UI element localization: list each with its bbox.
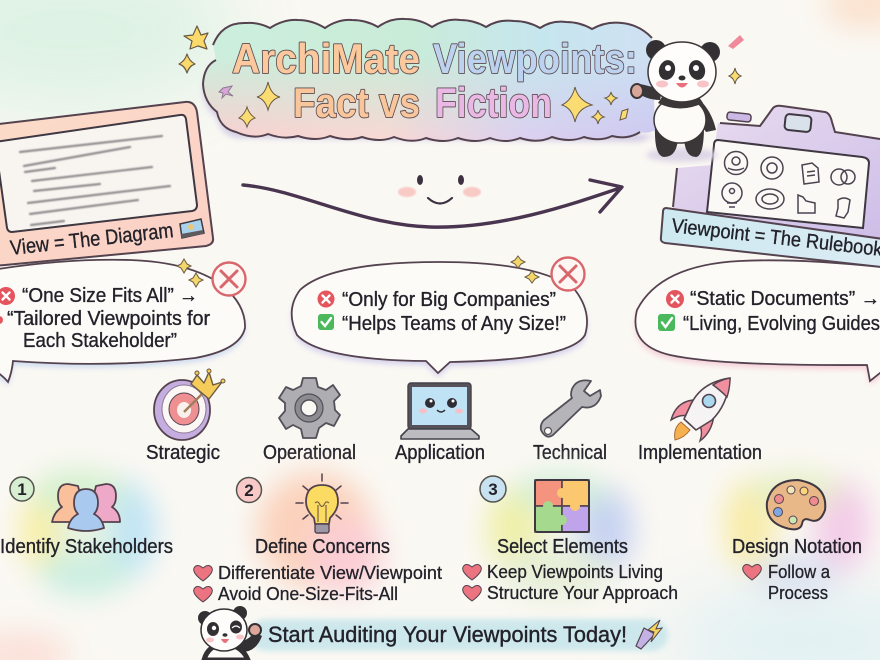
icon: green check — [658, 314, 675, 331]
step number — [480, 476, 506, 502]
camera screen — [707, 140, 869, 228]
step 2: define concerns — [194, 472, 442, 604]
layer icon: application laptop — [401, 383, 479, 439]
step number: 2 — [244, 481, 254, 500]
bubble text: “One Size Fits All” → — [22, 285, 198, 307]
layer icon: implementation rocket — [671, 378, 730, 441]
title text: Fact vs — [293, 79, 420, 126]
step label: Select Elements — [497, 536, 628, 558]
icon: palette — [767, 480, 825, 529]
icon: green check — [318, 314, 334, 330]
call to action banner — [250, 619, 668, 651]
glow — [20, 470, 156, 596]
step label: Define Concerns — [255, 536, 390, 558]
step label: Design Notation — [732, 536, 862, 558]
bubble text: “Only for Big Companies” — [342, 289, 556, 311]
screen icons — [722, 152, 855, 218]
layer labels — [146, 442, 762, 464]
title text: ArchiMate — [232, 35, 420, 82]
tips: Avoid One-Size-Fits-All — [218, 583, 398, 604]
icon: light bulb — [296, 474, 348, 533]
glow — [257, 472, 383, 593]
icon: big cross badge — [552, 258, 584, 290]
view frame: The Diagram — [0, 102, 213, 266]
step 3: select elements — [463, 474, 678, 603]
layer labels: Technical — [533, 442, 607, 464]
sparkles near panda — [728, 35, 744, 84]
tips: Differentiate View/Viewpoint — [218, 562, 442, 583]
cloud shape — [203, 19, 655, 141]
step 1: identify stakeholders — [0, 470, 173, 596]
tips: Follow a — [768, 561, 831, 582]
bubble text: “Static Documents” → — [690, 288, 880, 310]
blurred text lines — [20, 136, 170, 225]
bubble text — [342, 289, 566, 335]
panda mascot top right — [631, 40, 720, 162]
step number — [10, 477, 34, 501]
panda body — [654, 97, 706, 143]
bubble text: “Tailored Viewpoints for — [7, 308, 210, 330]
label strip — [661, 208, 880, 268]
layer labels: Operational — [263, 442, 356, 464]
frame screen — [0, 115, 197, 232]
step number: 3 — [488, 480, 498, 499]
frame body — [0, 102, 213, 266]
banner text: Start Auditing Your Viewpoints Today! — [268, 622, 627, 647]
step 4: design notation — [724, 472, 870, 603]
sparkles — [511, 256, 539, 283]
connecting arrow — [243, 180, 622, 227]
panda mascot bottom — [198, 606, 262, 660]
tips: Keep Viewpoints Living — [487, 561, 663, 582]
layer labels: Application — [395, 442, 485, 464]
tips — [194, 562, 442, 604]
title text: Viewpoints: — [433, 35, 637, 82]
glow — [724, 472, 870, 597]
sparkles — [177, 259, 203, 287]
title cloud — [203, 19, 655, 142]
layer icon: strategic target — [154, 369, 225, 440]
panda ears — [646, 40, 720, 62]
tips: Process — [768, 582, 828, 603]
panda face — [206, 620, 244, 643]
glow — [487, 474, 633, 600]
panda legs — [655, 126, 704, 157]
stars beside title — [179, 26, 208, 73]
icon: small picture — [180, 219, 204, 238]
panda head — [648, 42, 716, 102]
tips — [743, 561, 831, 603]
waving arm — [238, 624, 262, 652]
title text — [232, 35, 637, 126]
icon: red cross — [318, 290, 334, 308]
layer icon: operational gear — [279, 378, 340, 438]
smiley face — [398, 175, 481, 204]
panda body — [204, 644, 248, 660]
bubble text: “Helps Teams of Any Size!” — [342, 313, 566, 335]
banner band — [250, 619, 668, 651]
myth bubble: static documents — [635, 260, 880, 385]
bubble text — [7, 285, 210, 352]
title text: Fiction — [435, 79, 552, 126]
frame label: View = The Diagram — [9, 219, 175, 260]
viewfinder — [784, 114, 812, 132]
icon: lightning pencil — [636, 620, 662, 649]
crown — [191, 369, 225, 399]
icon: big cross badge — [212, 262, 246, 296]
icon: puzzle — [535, 480, 589, 532]
shutter button — [727, 112, 751, 122]
camera body — [673, 106, 880, 240]
panda face — [656, 58, 709, 88]
icon: people — [52, 484, 120, 531]
layer labels: Implementation — [638, 442, 762, 464]
step number: 1 — [17, 480, 27, 499]
panda arms — [634, 84, 716, 132]
step label: Identify Stakeholders — [0, 536, 173, 558]
panda head — [201, 609, 247, 651]
camera: viewpoint rulebook — [661, 106, 880, 268]
icon: red cross — [666, 290, 684, 308]
laptop face — [419, 398, 463, 414]
icon: red cross — [0, 287, 15, 305]
myth bubble: big companies — [292, 256, 587, 377]
myth bubble: one size — [0, 259, 246, 386]
panda ears — [198, 606, 247, 625]
layer icon: technical wrench — [541, 380, 601, 437]
bubble text: Each Stakeholder” — [23, 330, 177, 352]
bubble text — [683, 288, 880, 335]
step number — [236, 478, 262, 502]
layer labels: Strategic — [146, 442, 220, 464]
sparkles in title — [219, 82, 628, 127]
tips — [463, 561, 678, 603]
tips: Structure Your Approach — [487, 582, 678, 603]
